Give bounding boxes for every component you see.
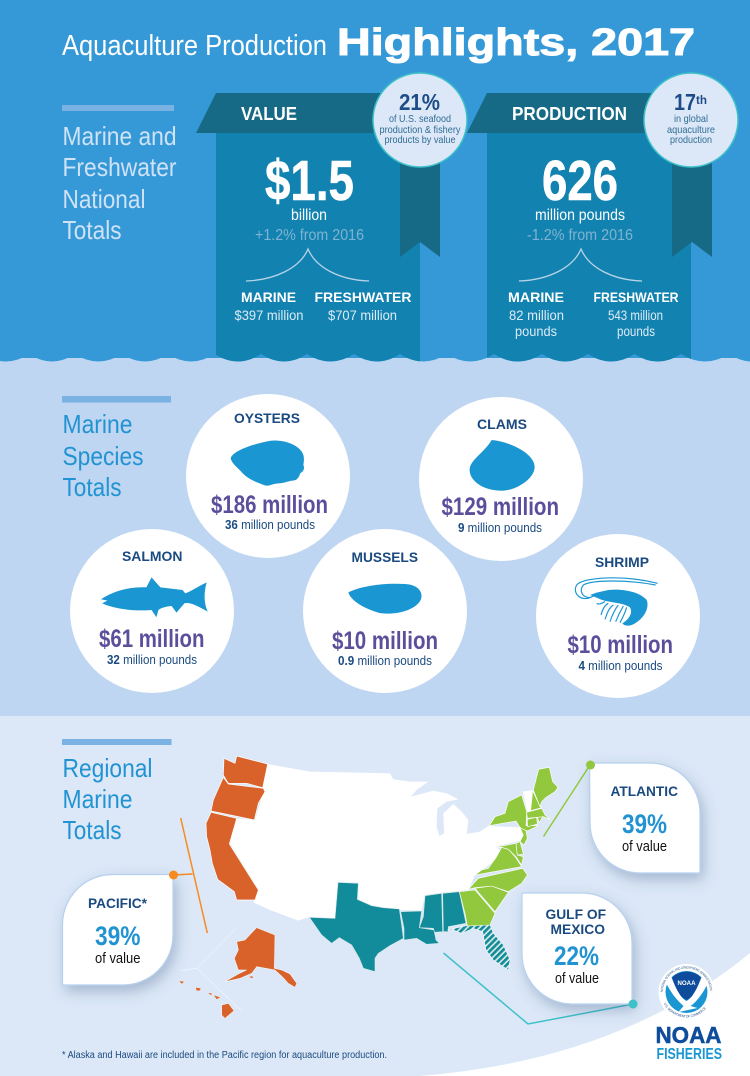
NOAA Fisheries logo xyxy=(656,964,722,1063)
callout circle: 17th: aquaculture xyxy=(667,124,715,136)
callout: Atlantic xyxy=(544,760,700,873)
callout: Pacific: of value xyxy=(95,950,140,967)
callout circle: 21% xyxy=(373,73,467,167)
callout: Pacific: 39% xyxy=(95,921,140,951)
ribbon tail xyxy=(400,130,440,257)
heading: marine species totals: Marine xyxy=(62,409,132,439)
icon: salmon xyxy=(101,577,208,617)
species: shrimp: $10 million xyxy=(568,631,673,659)
map: United States by region xyxy=(179,756,558,1018)
callout circle: 21%: of U.S. seafood xyxy=(389,113,451,125)
callout: Gulf of Mexico: GULF OF xyxy=(546,906,606,922)
production total: 626 xyxy=(542,149,618,213)
title: Aquaculture Production xyxy=(62,30,327,62)
heading: national totals xyxy=(62,105,177,245)
marine value xyxy=(234,289,304,323)
marine production: MARINE xyxy=(508,289,564,305)
callout: Pacific xyxy=(62,818,207,985)
species: salmon xyxy=(70,529,234,693)
connector xyxy=(544,765,590,836)
title: Highlights, 2017 xyxy=(337,22,695,64)
freshwater production xyxy=(594,289,678,339)
species: mussels xyxy=(303,529,467,693)
non-coastal states xyxy=(230,764,523,921)
species: salmon: 32 million pounds xyxy=(107,652,197,667)
brace xyxy=(246,249,369,281)
section background: marine species xyxy=(0,358,750,716)
species: oysters: OYSTERS xyxy=(234,410,300,426)
icon: shrimp xyxy=(575,578,658,626)
seal: NATIONAL OCEANIC AND ATMOSPHERIC ADMINISTRATION xyxy=(660,966,712,992)
value total: billion xyxy=(291,207,327,224)
seal: U.S. DEPARTMENT OF COMMERCE xyxy=(664,1002,706,1018)
connector xyxy=(173,818,207,933)
white corner curve xyxy=(420,953,750,1076)
ribbon header xyxy=(196,93,400,133)
species: mussels: MUSSELS xyxy=(352,549,418,565)
callout: Atlantic: of value xyxy=(622,838,667,855)
Alaska and Hawaii inset lines xyxy=(181,928,242,1011)
callout circle: 17th: in global xyxy=(674,113,708,125)
title xyxy=(62,22,695,64)
Gulf states xyxy=(309,882,443,972)
heading: national totals: Marine and xyxy=(62,121,176,151)
ribbon tail xyxy=(672,130,712,257)
species: clams: 9 million pounds xyxy=(458,520,542,535)
callout circle: 17th: 17 xyxy=(674,89,696,115)
ribbon header xyxy=(467,93,672,133)
species: shrimp: SHRIMP xyxy=(595,554,649,570)
value label: VALUE xyxy=(241,104,297,124)
heading: regional marine totals: Totals xyxy=(62,815,122,845)
callout: Gulf of Mexico: 22% xyxy=(554,941,599,971)
section background: regional totals xyxy=(0,716,750,1076)
heading: national totals: Totals xyxy=(62,215,122,245)
marine value: $397 million xyxy=(234,307,304,323)
heading: marine species totals: Species xyxy=(62,441,144,471)
callout circle: 17th: th xyxy=(696,93,707,107)
marine production xyxy=(508,289,564,339)
heading: regional marine totals: Regional xyxy=(62,753,152,783)
section background: national totals xyxy=(0,0,750,370)
change from 2016: +1.2% from 2016 xyxy=(255,227,364,244)
brace xyxy=(519,249,642,281)
change from 2016: -1.2% from 2016 xyxy=(527,227,633,244)
freshwater value: FRESHWATER xyxy=(314,289,412,305)
species: mussels: 0.9 million pounds xyxy=(338,653,432,668)
Vermont, white xyxy=(523,790,532,812)
species: oysters: 36 million pounds xyxy=(225,517,315,532)
icon: oyster xyxy=(231,441,304,486)
value total: $1.5 xyxy=(265,149,354,213)
NOAA Fisheries logo: FISHERIES xyxy=(656,1046,722,1063)
species: oysters: $186 million xyxy=(211,491,328,519)
callout circle: 21%: production & fishery xyxy=(380,124,461,136)
freshwater production: pounds xyxy=(617,323,655,339)
species: salmon: $61 million xyxy=(99,625,204,653)
seal xyxy=(658,964,712,1018)
species: salmon: SALMON xyxy=(122,548,182,564)
callout: Gulf of Mexico: of value xyxy=(555,970,599,987)
species: clams: CLAMS xyxy=(477,416,527,432)
wordmark: NOAA xyxy=(656,1022,722,1048)
production total: million pounds xyxy=(535,207,625,224)
panel: value xyxy=(196,72,468,362)
species: clams xyxy=(419,397,583,561)
callout circle: 17th xyxy=(644,73,738,167)
freshwater value xyxy=(314,289,412,323)
seal: NOAA xyxy=(678,980,696,987)
icon: mussel xyxy=(348,584,421,614)
callout: Atlantic: ATLANTIC xyxy=(610,783,678,799)
heading: national totals: National xyxy=(62,184,146,214)
connector xyxy=(444,953,633,1024)
marine production: pounds xyxy=(515,323,557,339)
marine value: MARINE xyxy=(241,289,296,305)
heading: regional marine totals xyxy=(62,739,172,845)
callout: Pacific: PACIFIC* xyxy=(88,895,148,911)
species: oysters xyxy=(186,394,350,558)
panel: production xyxy=(467,72,739,362)
callout circle: 17th: production xyxy=(670,134,712,146)
production label: PRODUCTION xyxy=(512,104,627,124)
heading: regional marine totals: Marine xyxy=(62,784,132,814)
icon: clam xyxy=(470,440,535,491)
marine production: 82 million xyxy=(509,307,564,323)
species: mussels: $10 million xyxy=(332,627,438,655)
species: clams: $129 million xyxy=(442,493,559,521)
heading: national totals: Freshwater xyxy=(62,152,177,182)
heading: marine species totals: Totals xyxy=(62,472,122,502)
freshwater production: 543 million xyxy=(608,307,663,323)
Atlantic states and Alabama, Florida xyxy=(443,767,558,970)
species: shrimp xyxy=(536,534,700,698)
Pacific states xyxy=(179,756,297,1018)
heading: marine species totals xyxy=(62,396,171,502)
footnote: * Alaska and Hawaii are included in the Pacific region for aquaculture production. xyxy=(62,1050,387,1061)
freshwater value: $707 million xyxy=(328,307,397,323)
callout: Gulf of Mexico xyxy=(444,893,638,1024)
callout circle: 21%: 21% xyxy=(399,89,440,115)
callout: Gulf of Mexico: MEXICO xyxy=(550,921,605,937)
freshwater production: FRESHWATER xyxy=(594,289,678,305)
callout circle: 21%: products by value xyxy=(384,134,456,146)
species: shrimp: 4 million pounds xyxy=(578,658,663,673)
callout: Atlantic: 39% xyxy=(622,809,667,839)
